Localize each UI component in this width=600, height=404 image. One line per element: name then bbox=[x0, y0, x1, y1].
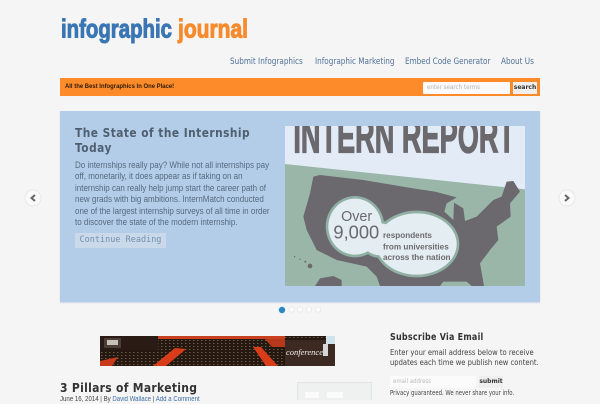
slide description: internship can really help jump start the career path of bbox=[75, 183, 266, 193]
cloud callout: Over bbox=[341, 209, 372, 225]
slide description: off, monetarily, it does appear as if taking on an bbox=[75, 171, 243, 181]
navigation menu: Infographic Marketing bbox=[315, 56, 394, 67]
subscribe heading: Subscribe Via Email bbox=[390, 332, 484, 343]
slider pagination dots bbox=[278, 306, 321, 314]
submit button bbox=[479, 376, 503, 388]
slide panel bbox=[60, 111, 540, 302]
slide description: one of the largest internship surveys of all time in order bbox=[75, 206, 270, 216]
email input: email address bbox=[393, 378, 431, 385]
search button bbox=[513, 82, 537, 94]
subscribe description: updates each time we publish new content. bbox=[390, 357, 539, 367]
cloud callout: across the nation bbox=[383, 253, 451, 262]
search input: enter search terms bbox=[427, 84, 480, 91]
privacy note: Privacy guaranteed. We never share your info. bbox=[390, 389, 514, 397]
conference banner ad bbox=[100, 336, 335, 366]
slider previous arrow bbox=[24, 190, 42, 206]
submit button: submit bbox=[479, 378, 503, 385]
tagline: All the Best Infographics In One Place! bbox=[65, 83, 174, 90]
slide description: new grads with big ambitions. InternMatch conducted bbox=[75, 194, 264, 204]
cloud callout bbox=[326, 196, 459, 277]
navigation menu bbox=[230, 56, 534, 67]
cloud callout: respondents bbox=[383, 231, 432, 240]
article byline: June 16, 2014 | By David Wallace | Add a Comment bbox=[60, 396, 200, 403]
navigation menu: Submit Infographics bbox=[230, 56, 303, 67]
email input bbox=[390, 376, 476, 388]
orange tagline and search bar bbox=[60, 78, 540, 96]
search input bbox=[423, 82, 510, 94]
slide heading bbox=[75, 126, 250, 155]
article thumbnail bbox=[297, 382, 372, 400]
navigation menu: Embed Code Generator bbox=[405, 56, 490, 67]
continue reading button: Continue Reading bbox=[80, 235, 161, 245]
cloud callout: 9,000 bbox=[333, 222, 379, 243]
slide description: to discover the state of the modern internship. bbox=[75, 217, 238, 227]
map of the United States bbox=[294, 175, 520, 286]
logo: infographic bbox=[61, 14, 172, 44]
article title: 3 Pillars of Marketing bbox=[60, 380, 197, 395]
conference banner ad: conference bbox=[286, 347, 323, 357]
search button: search bbox=[514, 84, 536, 91]
cloud callout: from universities bbox=[383, 242, 449, 251]
slide description: Do internships really pay? While not all internships pay bbox=[75, 160, 269, 170]
navigation menu: About Us bbox=[501, 56, 534, 67]
slide heading: Today bbox=[75, 141, 112, 155]
slide heading: The State of the Internship bbox=[75, 126, 250, 140]
subscribe widget bbox=[390, 332, 539, 397]
continue reading button bbox=[75, 233, 166, 248]
slider next arrow bbox=[558, 190, 576, 206]
slide description bbox=[75, 160, 270, 227]
intern report image bbox=[285, 126, 525, 286]
subscribe description bbox=[390, 347, 539, 367]
subscribe description: Enter your email address below to receive bbox=[390, 347, 534, 357]
